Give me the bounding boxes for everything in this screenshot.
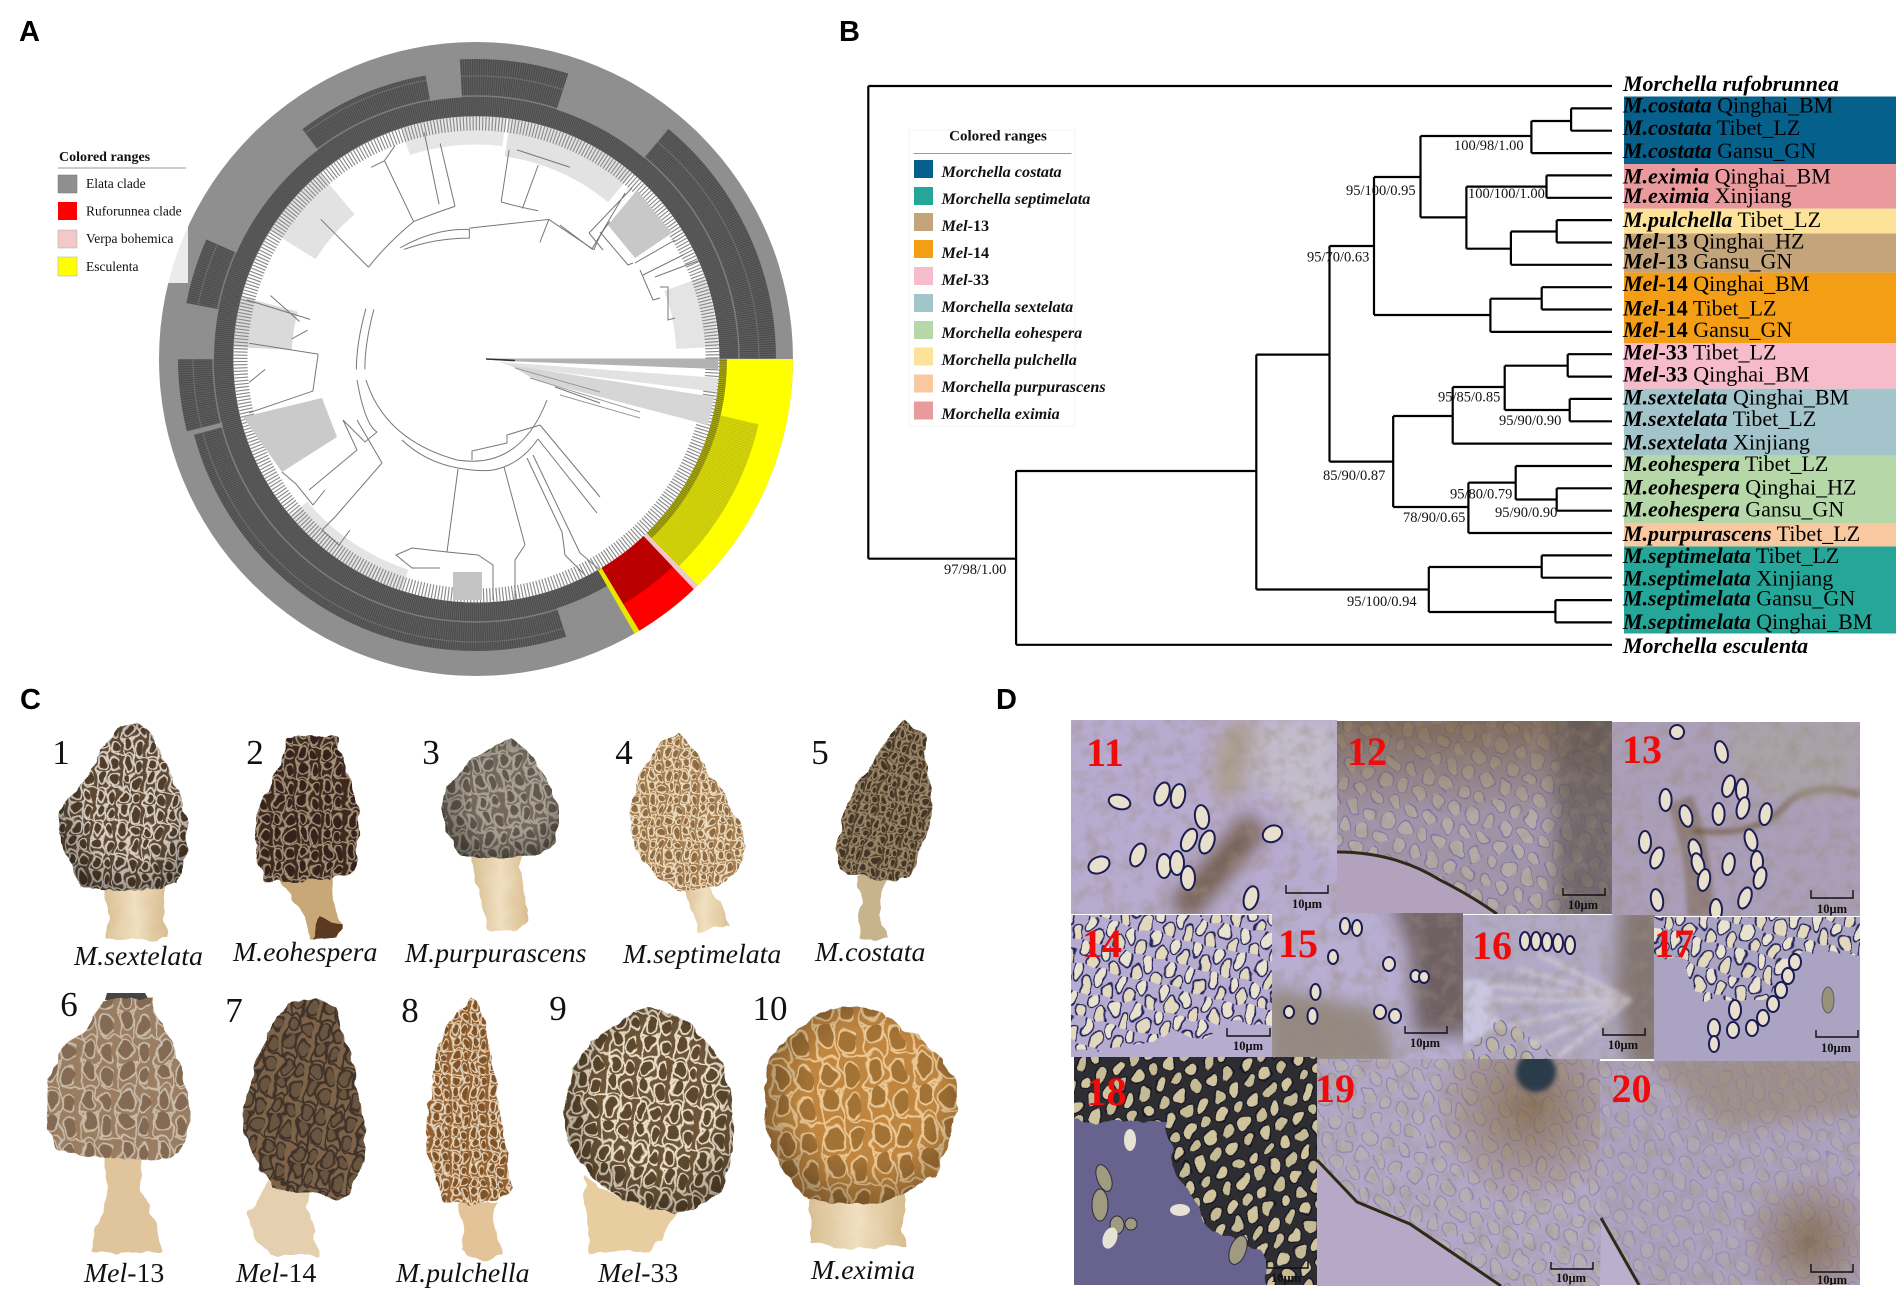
panel letter C: C (20, 684, 41, 716)
specimen 8: M.pulchella (395, 991, 530, 1289)
panel D: ascospore micrographs (1061, 700, 1880, 1297)
micrograph 11: 10μm (1292, 897, 1323, 911)
bootstrap support values: 95/100/0.94 (1347, 594, 1417, 610)
specimen 7: Mel-14 (225, 991, 366, 1289)
specimen 2: M.eohespera (232, 733, 377, 968)
panel letter B: B (839, 16, 860, 48)
micrograph 16: 10μm (1608, 1038, 1639, 1052)
legend item: Morchella eohespera: Morchella eohespera (940, 324, 1082, 342)
specimen 7: Mel-14: Mel-14 (235, 1258, 316, 1289)
taxon labels: M.sextelata Xinjiang (1622, 430, 1810, 454)
taxon labels: Mel-14 Tibet_LZ (1622, 296, 1776, 321)
legend item: Verpa bohemica: Verpa bohemica (86, 231, 173, 246)
legend item: Mel-33: Mel-33 (940, 271, 989, 289)
central fan of outgroup branches (486, 358, 718, 425)
bootstrap support values: 95/70/0.63 (1307, 250, 1369, 266)
taxon labels: Mel-14 Gansu_GN (1622, 317, 1792, 342)
specimen 1: M.sextelata: M.sextelata (73, 941, 203, 972)
specimen 4: M.septimelata: 4 (615, 733, 633, 772)
panel C: morel specimens (46, 720, 957, 1289)
legend item: Ruforunnea clade: Ruforunnea clade (86, 204, 182, 218)
specimen 3: M.purpurascens: 3 (422, 733, 440, 772)
micrograph 13: 13 (1622, 727, 1662, 772)
upper tree branches (247, 133, 610, 413)
taxon labels: M.septimelata Tibet_LZ (1622, 543, 1839, 568)
legend item: Morchella costata (914, 160, 1062, 181)
taxon labels: M.purpurascens Tibet_LZ (1622, 521, 1860, 546)
specimen 10: M.eximia (752, 989, 957, 1286)
bootstrap support values: 95/90/0.90 (1495, 505, 1557, 521)
bootstrap support values: 78/90/0.65 (1403, 510, 1465, 526)
bootstrap support values: 85/90/0.87 (1323, 468, 1385, 484)
specimen 10: M.eximia: M.eximia (810, 1255, 915, 1286)
micrograph 17: 17 (1654, 921, 1694, 966)
legend item: Mel-33 (914, 267, 989, 289)
panel letter D: D (996, 684, 1017, 716)
micrograph 15: 10μm (1410, 1036, 1441, 1050)
Verpa bohemica pink sliver (476, 359, 698, 589)
specimen 10: M.eximia: 10 (752, 989, 788, 1028)
micrograph 13 (1612, 722, 1860, 916)
specimen 9: Mel-33 (549, 989, 734, 1289)
micrograph 14 (1071, 915, 1272, 1057)
Elata clade dark leaf label blocks (204, 88, 748, 630)
panel A: circular phylogenetic tree (57, 42, 793, 676)
specimen 3: M.purpurascens: M.purpurascens (404, 938, 586, 969)
taxon labels: M.costata Gansu_GN (1622, 138, 1816, 163)
specimen 5: M.costata: 5 (811, 733, 829, 772)
legend: colored ranges A (57, 145, 188, 283)
legend: colored ranges B (909, 128, 1106, 426)
specimen 9: Mel-33: Mel-33 (597, 1258, 678, 1289)
micrograph 17: 10μm (1821, 1041, 1852, 1055)
taxon labels: Mel-33 Tibet_LZ (1622, 340, 1776, 364)
bootstrap support values: 100/100/1.00 (1468, 186, 1545, 202)
specimen 2: M.eohespera: M.eohespera (232, 937, 377, 968)
legend item: Esculenta: Esculenta (86, 259, 138, 274)
legend item: Morchella eximia: Morchella eximia (940, 405, 1060, 423)
specimen 5: M.costata (811, 720, 930, 968)
Esculenta clade yellow wedge (476, 359, 793, 586)
legend item: Morchella costata: Morchella costata (940, 163, 1062, 181)
specimen 6: Mel-13: 6 (60, 985, 78, 1024)
micrograph 12: 10μm (1568, 898, 1599, 912)
specimen 6: Mel-13 (46, 985, 189, 1289)
micrograph 15: 15 (1278, 921, 1318, 966)
long leaf regions (240, 124, 712, 596)
micrograph 11 (1071, 720, 1337, 914)
taxon labels: M.sextelata Qinghai_BM (1622, 385, 1849, 410)
taxon labels (1622, 71, 1872, 658)
taxon labels: Mel-13 Qinghai_HZ (1622, 229, 1804, 254)
micrograph 20 (1600, 1061, 1860, 1287)
legend item: Morchella eximia (914, 402, 1060, 423)
tree branches (868, 86, 1612, 645)
taxon labels: M.sextelata Tibet_LZ (1622, 406, 1816, 431)
yellow separator sliver (476, 359, 639, 634)
bootstrap support values: 95/90/0.90 (1499, 413, 1561, 429)
bootstrap support values (944, 138, 1561, 610)
legend item: Morchella septimelata: Morchella septimelata (940, 190, 1090, 208)
micrograph 19: 19 (1315, 1066, 1355, 1111)
specimen 9: Mel-33: 9 (549, 989, 567, 1028)
legend item: Morchella sextelata: Morchella sextelata (940, 298, 1073, 316)
micrograph 18: 10μm (1271, 1271, 1302, 1285)
inner white tree disc (234, 116, 720, 602)
specimen 1: M.sextelata (52, 722, 203, 972)
micrograph 14: 14 (1082, 921, 1122, 966)
specimen 8: M.pulchella: M.pulchella (395, 1258, 530, 1289)
taxon labels: Mel-13 Gansu_GN (1622, 249, 1792, 274)
micrograph 19: 10μm (1556, 1271, 1587, 1285)
micrograph 12: 12 (1347, 729, 1387, 774)
taxon labels: M.septimelata Qinghai_BM (1622, 609, 1872, 634)
legend item: Mel-13: Mel-13 (940, 217, 989, 235)
clade colored bands (1624, 96, 1896, 634)
taxon labels: M.pulchella Tibet_LZ (1622, 207, 1821, 232)
specimen 4: M.septimelata: M.septimelata (622, 939, 781, 970)
taxon labels: M.septimelata Xinjiang (1622, 566, 1833, 591)
micrograph 15 (1272, 913, 1463, 1059)
taxon labels: Morchella esculenta (1622, 633, 1808, 658)
micrograph 20: 10μm (1817, 1273, 1848, 1287)
bootstrap support values: 95/85/0.85 (1438, 390, 1500, 406)
taxon labels: M.eximia Qinghai_BM (1622, 163, 1831, 188)
legend title: Colored ranges (59, 150, 151, 165)
micrograph 13: 10μm (1817, 902, 1848, 916)
micrograph 18 (1074, 1057, 1317, 1285)
specimen 8: M.pulchella: 8 (401, 991, 419, 1030)
micrograph 19 (1315, 1059, 1600, 1286)
bootstrap support values: 97/98/1.00 (944, 562, 1006, 578)
legend item: Morchella sextelata (914, 294, 1073, 316)
leaf line hatch (240, 124, 712, 596)
Elata clade outer gray disc (159, 42, 793, 676)
bootstrap support values: 100/98/1.00 (1454, 138, 1524, 154)
micrograph 11: 11 (1086, 730, 1124, 775)
specimen 1: M.sextelata: 1 (52, 733, 70, 772)
taxon labels: M.costata Tibet_LZ (1622, 115, 1800, 140)
micrograph 17 (1654, 917, 1860, 1061)
specimen 2: M.eohespera: 2 (246, 733, 264, 772)
taxon labels: Mel-33 Qinghai_BM (1622, 362, 1809, 387)
legend item: Elata clade: Elata clade (86, 176, 146, 191)
panel B: rectangular phylogenetic tree (868, 71, 1896, 658)
legend item: Morchella pulchella: Morchella pulchella (940, 351, 1077, 369)
bootstrap support values: 95/100/0.95 (1346, 183, 1416, 199)
micrograph 20: 20 (1612, 1066, 1652, 1111)
micrograph 14: 10μm (1233, 1039, 1264, 1053)
taxon labels: M.eohespera Tibet_LZ (1622, 451, 1828, 476)
legend item: Mel-14: Mel-14 (940, 244, 989, 262)
taxon labels: Mel-14 Qinghai_BM (1622, 271, 1809, 296)
bootstrap support values: 95/80/0.79 (1450, 486, 1512, 502)
taxon labels: M.costata Qinghai_BM (1622, 92, 1833, 118)
specimen 4: M.septimelata (615, 730, 781, 970)
taxon labels: M.eximia Xinjiang (1622, 183, 1792, 208)
micrograph 16: 16 (1472, 923, 1512, 968)
specimen 5: M.costata: M.costata (814, 937, 925, 968)
taxon labels: M.eohespera Qinghai_HZ (1622, 474, 1856, 499)
lower and right tree branches (282, 188, 700, 600)
panel letter A: A (19, 16, 40, 48)
micrograph 18: 18 (1086, 1069, 1126, 1114)
micrograph 12 (1337, 721, 1612, 914)
legend item: Morchella purpurascens: Morchella purpurascens (940, 378, 1106, 396)
taxon labels: M.septimelata Gansu_GN (1622, 586, 1855, 611)
taxon labels: Morchella rufobrunnea (1622, 71, 1839, 96)
legend item: Morchella pulchella (914, 348, 1077, 369)
dense leaf blocks (243, 190, 672, 600)
micrograph 16 (1463, 915, 1655, 1059)
Ruforunnea clade red wedge (476, 359, 694, 631)
specimen 7: Mel-14: 7 (225, 991, 243, 1030)
legend item: Mel-13 (914, 213, 989, 235)
legend item: Mel-14 (914, 240, 989, 262)
legend title: Colored ranges (949, 128, 1047, 144)
taxon labels: M.eohespera Gansu_GN (1622, 496, 1844, 522)
specimen 3: M.purpurascens (404, 733, 586, 969)
specimen 6: Mel-13: Mel-13 (83, 1258, 164, 1289)
